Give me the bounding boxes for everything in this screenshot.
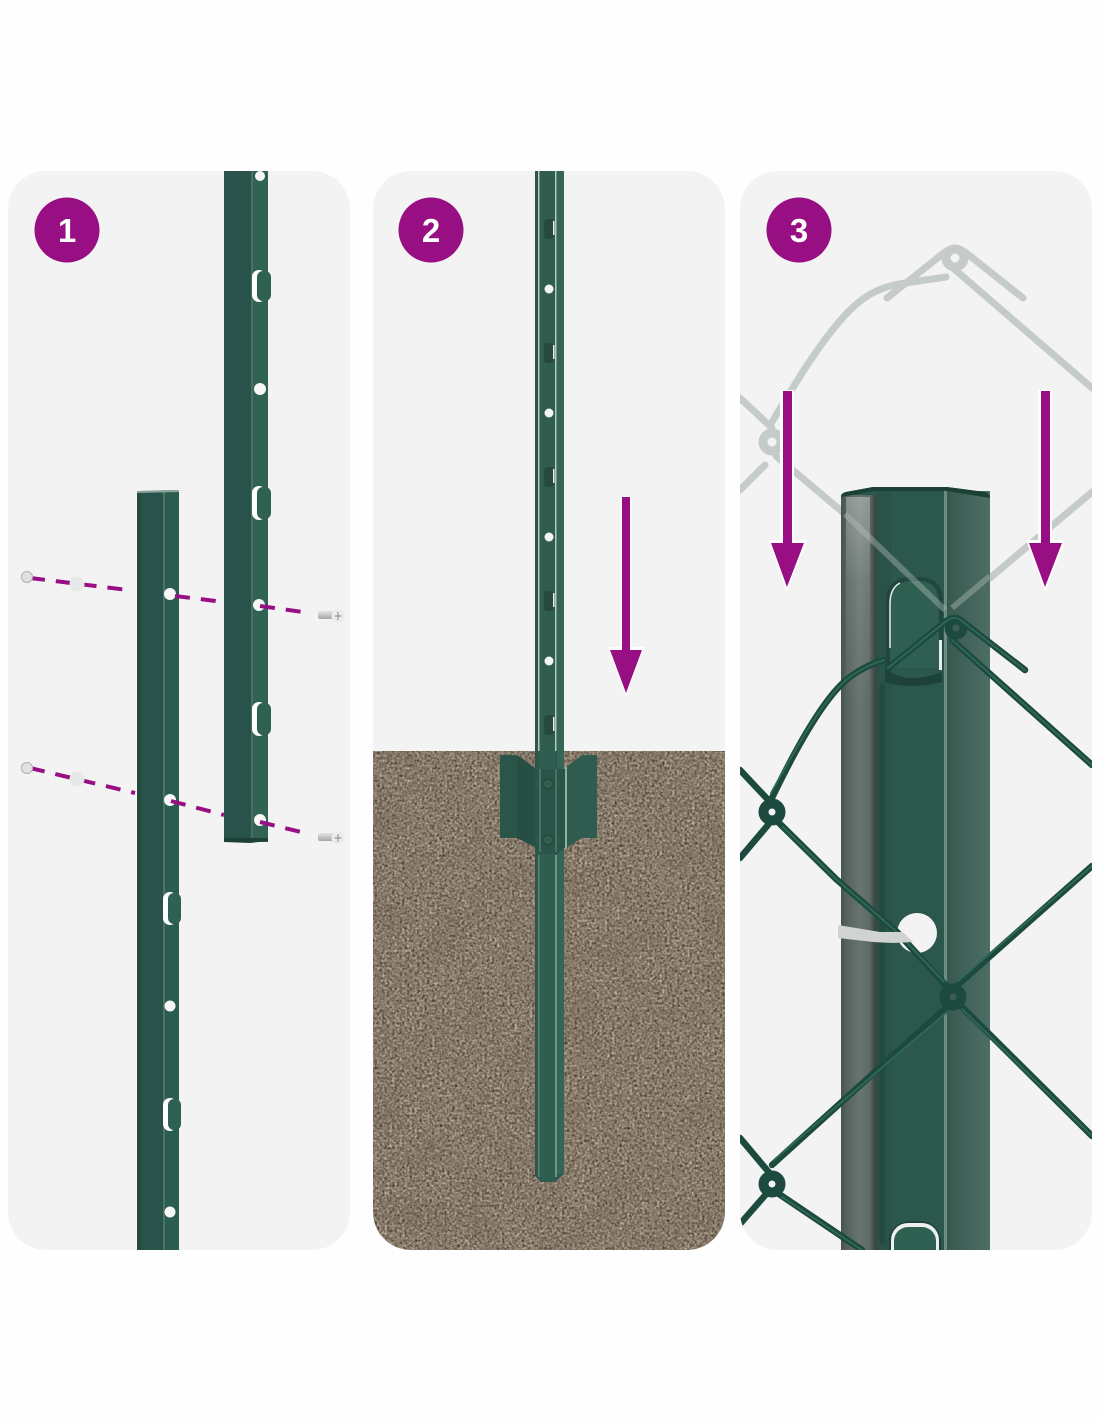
arrow: downward xyxy=(608,496,644,697)
icon: screw upper xyxy=(318,611,342,620)
ghost wire mesh in raised position xyxy=(740,248,1092,578)
icon: nut lower xyxy=(22,762,32,774)
panel: step 3 hook the chain-link mesh onto the post xyxy=(740,171,1092,1271)
dashed assembly lines xyxy=(30,578,310,833)
step number badge 1: 1 xyxy=(58,212,76,249)
driven post xyxy=(535,171,564,1182)
step number badge 1 xyxy=(34,198,100,262)
soil ground xyxy=(373,751,725,1250)
icon: nut upper xyxy=(22,572,32,582)
icon: washer upper xyxy=(70,576,84,592)
lower slot and tab xyxy=(889,1221,941,1250)
arrow: downward left xyxy=(768,390,807,592)
ghost wire crossing over post xyxy=(845,514,990,610)
upper slot and tab xyxy=(885,577,943,686)
panel: step 1 bolt the post sections together xyxy=(8,171,350,1250)
round hole in post xyxy=(897,913,937,953)
step number badge 2: 2 xyxy=(422,212,440,249)
fence post close-up xyxy=(841,487,990,1271)
icon: screw lower xyxy=(318,833,342,842)
zip tie xyxy=(838,925,913,943)
anchor plate xyxy=(500,755,597,854)
step number badge 2 xyxy=(398,198,464,262)
panel: step 2 drive the post into the ground xyxy=(373,171,725,1250)
upper post section xyxy=(224,171,271,843)
dark chain-link mesh xyxy=(740,618,1092,1250)
step number badge 3 xyxy=(766,198,832,262)
lower post section xyxy=(137,490,181,1250)
step number badge 3: 3 xyxy=(790,212,808,249)
arrow: downward right xyxy=(1026,390,1065,592)
icon: washer lower xyxy=(70,772,84,786)
